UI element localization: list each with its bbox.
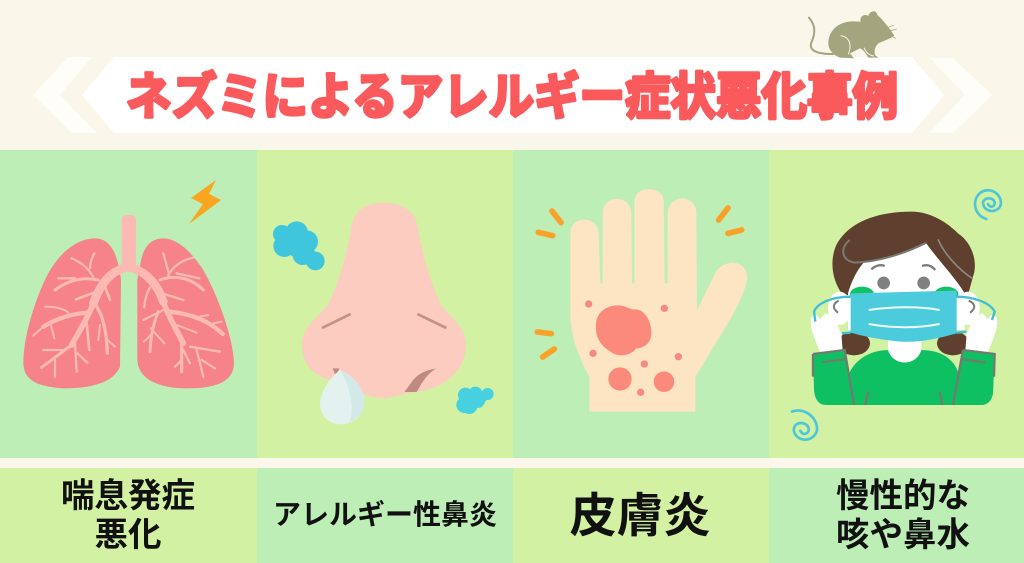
icon: mouse [809,11,897,58]
panel: top 3 [513,150,769,458]
panel: label 1 [0,468,257,563]
icon: irritation marks [537,208,742,357]
panel: label 3: 皮膚炎 [570,489,710,542]
panel: label 1: 喘息発症 [61,478,195,515]
icon: nose [302,203,466,424]
icon: woman with mask [811,212,997,405]
panel: label 3 [513,468,769,563]
title: ネズミによるアレルギー症状悪化事例 [126,69,898,125]
panel: label 2 [257,468,513,563]
panel: label 1: 悪化 [94,517,162,554]
icon: lightning [189,180,221,224]
right chevron [929,58,992,133]
mask [851,291,957,342]
panel: top 2 [257,150,513,458]
icon: water drop [320,370,364,424]
panel: label 4 [769,468,1024,563]
panel: label 4: 咳や鼻水 [836,517,970,554]
sweater [848,350,960,405]
hands [811,314,843,354]
icon: dust cloud small [456,387,494,414]
header background [0,0,1024,150]
panel: top 1 [0,150,257,458]
title banner [82,57,944,133]
divider band [0,458,1024,468]
panel: label 2: アレルギー性鼻炎 [273,499,497,530]
left chevron [33,57,97,133]
icon: lungs [23,215,234,388]
icon: dizzy spiral top [975,190,1001,219]
ears [828,292,851,325]
icon: dust cloud large [273,221,325,270]
rash blotch [596,305,651,355]
icon: dizzy spiral bottom [792,410,817,440]
panel: label 4: 慢性的な [836,478,970,515]
panel: top 4 [769,150,1024,458]
icon: hand with rash [570,189,747,412]
